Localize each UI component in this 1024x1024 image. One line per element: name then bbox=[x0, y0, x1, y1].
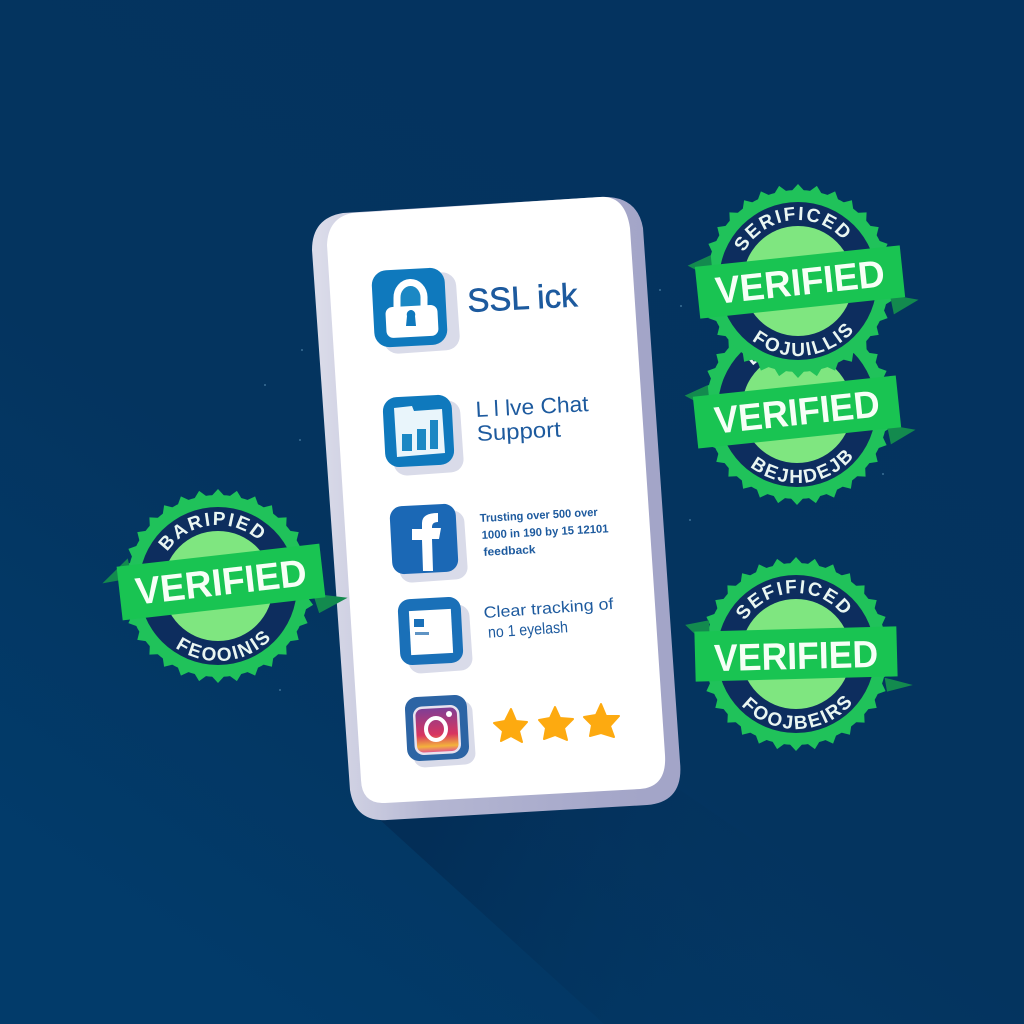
label: facebook description: Trusting over 500 over bbox=[480, 507, 598, 525]
seal edge bbox=[699, 557, 893, 751]
label: live chat support: Support bbox=[476, 417, 561, 446]
ring text bbox=[158, 512, 270, 661]
ring text bbox=[736, 580, 851, 730]
label: document description: no 1 eyelash bbox=[487, 619, 568, 642]
label: VERIFIED bbox=[713, 253, 887, 313]
row: live chat bbox=[382, 391, 590, 476]
badge: verified 1 bbox=[688, 184, 918, 378]
badge: verified 3 bbox=[685, 557, 912, 751]
phone long shadow bbox=[378, 790, 1024, 1024]
ring text: FEOOINIS bbox=[176, 631, 270, 661]
ribbon tails bbox=[684, 364, 917, 465]
icon: instagram bbox=[404, 694, 476, 768]
label: VERIFIED bbox=[133, 552, 309, 614]
ring text: ETIFIED bbox=[749, 360, 757, 366]
ring text: SEFIFICED bbox=[736, 580, 850, 619]
ribbon bbox=[695, 245, 905, 319]
ring text bbox=[749, 360, 852, 483]
scattered dots bbox=[264, 289, 884, 691]
ribbon tails bbox=[100, 534, 349, 637]
phone card bbox=[312, 197, 680, 820]
ribbon bbox=[117, 544, 325, 620]
label: SSL: SSL ick bbox=[466, 276, 579, 319]
inner circle bbox=[163, 531, 273, 641]
ring text bbox=[734, 206, 852, 356]
label: VERIFIED bbox=[712, 383, 882, 443]
phone screen bbox=[327, 197, 665, 803]
phone edge bbox=[312, 197, 680, 820]
stars bbox=[494, 704, 619, 742]
seal edge bbox=[701, 184, 895, 378]
icon: chart bbox=[382, 394, 464, 476]
label: live chat support: L l lve Chat bbox=[475, 391, 589, 422]
icon: lock bbox=[371, 267, 461, 355]
icon: facebook bbox=[389, 503, 468, 583]
inner circle bbox=[743, 226, 853, 336]
badge: verified 4 bbox=[102, 489, 348, 683]
row: facebook bbox=[389, 503, 610, 583]
ring text: BEJHDEJB bbox=[750, 450, 852, 483]
ribbon tails bbox=[687, 234, 920, 335]
badge: verified 2 bbox=[684, 340, 916, 505]
label: document description: Clear tracking of bbox=[483, 596, 615, 622]
label: facebook description: 1000 in 190 by 15 12101 bbox=[481, 523, 609, 542]
ring text: FOOJBEIRS bbox=[742, 696, 851, 730]
label: facebook description: feedback bbox=[483, 544, 536, 559]
ribbon bbox=[694, 626, 898, 682]
seal edge bbox=[121, 489, 315, 683]
inner circle bbox=[742, 353, 852, 463]
ribbon bbox=[693, 375, 901, 449]
ribbon tails bbox=[685, 615, 913, 697]
ring text: FOJUILLIS bbox=[752, 324, 852, 356]
inner circle bbox=[741, 599, 851, 709]
row: document bbox=[397, 596, 616, 674]
seal edge bbox=[700, 311, 894, 505]
row: instagram and stars bbox=[404, 694, 619, 768]
ring text: SERIFICED bbox=[734, 206, 850, 250]
label: VERIFIED bbox=[714, 634, 879, 680]
ring text: BARIPIED bbox=[158, 512, 264, 551]
row: SSL lock bbox=[371, 267, 579, 355]
icon: document bbox=[397, 596, 473, 674]
